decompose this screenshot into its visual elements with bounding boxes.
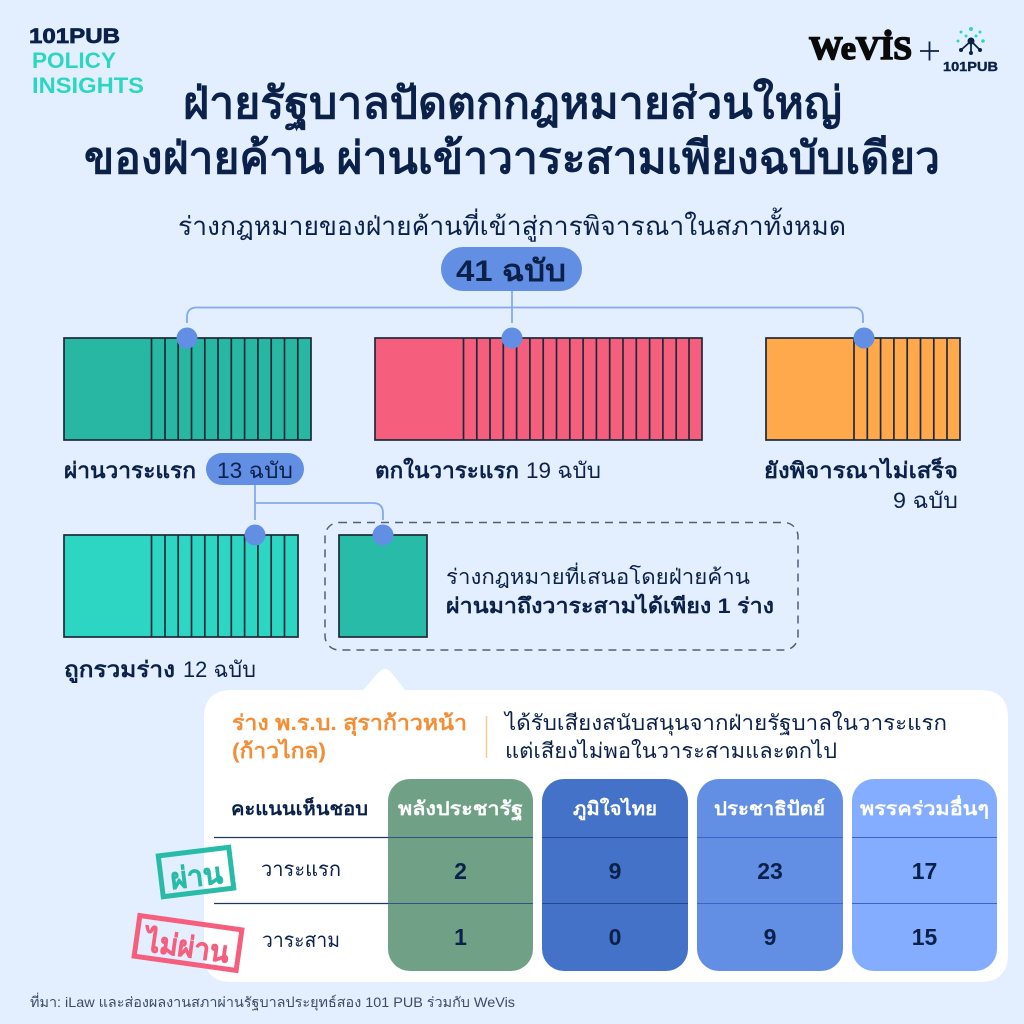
bill name: ร่าง พ.ร.บ. สุราก้าวหน้า (232, 711, 467, 737)
column: Bhumjaithai: ภูมิใจไทย (573, 797, 657, 821)
total pill: 41 ฉบับ: 41 ฉบับ (456, 255, 566, 288)
column: Democrat (697, 779, 843, 971)
stamp: not passed: ไม่ผ่าน (141, 924, 232, 970)
label: fell in first reading: ตกในวาระแรก (375, 457, 519, 483)
title: ของฝ่ายค้าน ผ่านเข้าวาระสามเพียงฉบับเดียว (84, 134, 940, 183)
row label: third reading: วาระสาม (262, 930, 340, 952)
label: passed first reading: ผ่านวาระแรก (64, 458, 196, 483)
label: fell in first reading (375, 457, 601, 483)
stamp: passed: ผ่าน (169, 858, 225, 896)
label: merged 12 bills: ถูกรวมร่าง (64, 657, 175, 684)
connector lines: 13 bills to sub-groups (255, 485, 383, 520)
bar: fell in first reading, 19 bills (375, 338, 702, 440)
column: Democrat: ประชาธิปัตย์ (714, 798, 825, 820)
logo: WeVis + 101 PUB (809, 27, 998, 74)
label: merged 12 bills (64, 657, 256, 684)
bar: passed first reading, 13 bills (64, 338, 311, 440)
label: still under consideration: ยังพิจารณาไม่เสร็จ (764, 456, 958, 483)
stamp: passed (158, 847, 234, 897)
title (84, 77, 940, 183)
connector dots: second row (244, 524, 394, 546)
label: still under consideration (764, 456, 958, 513)
title: ฝ่ายรัฐบาลปัดตกกฎหมายส่วนใหญ่ (183, 77, 842, 131)
row label: first reading: วาระแรก (261, 859, 341, 881)
column: other coalition parties (852, 779, 997, 971)
bill name (232, 711, 467, 763)
logo: 101 PUB Policy Insights: 101PUB (29, 25, 120, 48)
stamp: not passed (134, 916, 242, 971)
bill description: แต่เสียงไม่พอในวาระสามและตกไป (505, 739, 837, 763)
label: merged 12 bills: 12 ฉบับ (183, 657, 256, 682)
source note: ที่มา: iLaw และส่องผลงานสภาผ่านรัฐบาลประยุทธ์สอง 101 PUB ร่วมกับ WeVis (30, 993, 515, 1011)
bill description: ได้รับเสียงสนับสนุนจากฝ่ายรัฐบาลในวาระแรก (503, 711, 947, 736)
bill description (503, 711, 947, 763)
column: other coalition parties: 17 (912, 858, 937, 884)
bar: merged, 12 bills (64, 535, 298, 637)
logo: 101 PUB Policy Insights: INSIGHTS (32, 73, 144, 98)
panel: liquor bill votes (204, 669, 1008, 982)
subtitle: ร่างกฎหมายของฝ่ายค้านที่เข้าสู่การพิจารณาในสภาทั้งหมด (178, 207, 846, 242)
column: Palang Pracharath: 2 (454, 858, 467, 884)
callout box: one bill reached third reading: ผ่านมาถึงวาระสามได้เพียง 1 ร่าง (446, 593, 774, 618)
label: fell in first reading: 19 ฉบับ (526, 458, 601, 483)
column: Bhumjaithai (542, 779, 688, 971)
bar: single bill (339, 535, 427, 637)
column: other coalition parties: พรรคร่วมอื่นๆ (860, 795, 989, 820)
bill name: (ก้าวไกล) (232, 738, 326, 763)
bar: still under consideration, 9 bills (766, 338, 960, 440)
logo: 101 PUB Policy Insights (29, 25, 144, 98)
column: Bhumjaithai: 0 (609, 924, 621, 950)
connector lines: total to three groups (187, 290, 863, 323)
connector dots: top row (176, 328, 874, 348)
label: still under consideration: 9 ฉบับ (893, 488, 958, 513)
callout box: one bill reached third reading: ร่างกฎหมายที่เสนอโดยฝ่ายค้าน (446, 562, 750, 589)
table header label: คะแนนเห็นชอบ (231, 796, 368, 820)
column: Democrat: 23 (757, 858, 783, 884)
total pill: 41 ฉบับ (441, 247, 582, 291)
column: Bhumjaithai: 9 (609, 858, 621, 884)
logo: WeVis + 101 PUB: WeVIS (809, 31, 912, 67)
column: Palang Pracharath (388, 779, 533, 971)
icon: 101 PUB network (956, 27, 985, 55)
column: Palang Pracharath: พลังประชารัฐ (398, 799, 523, 822)
logo: WeVis + 101 PUB: 101PUB (943, 59, 998, 74)
column: other coalition parties: 15 (912, 924, 937, 950)
callout box: one bill reached third reading (325, 522, 798, 650)
column: Democrat: 9 (764, 924, 776, 950)
pill: 13 ฉบับ (206, 453, 304, 485)
column: Palang Pracharath: 1 (454, 924, 467, 950)
logo: 101 PUB Policy Insights: POLICY (32, 48, 116, 73)
pill: 13 ฉบับ: 13 ฉบับ (217, 458, 293, 483)
